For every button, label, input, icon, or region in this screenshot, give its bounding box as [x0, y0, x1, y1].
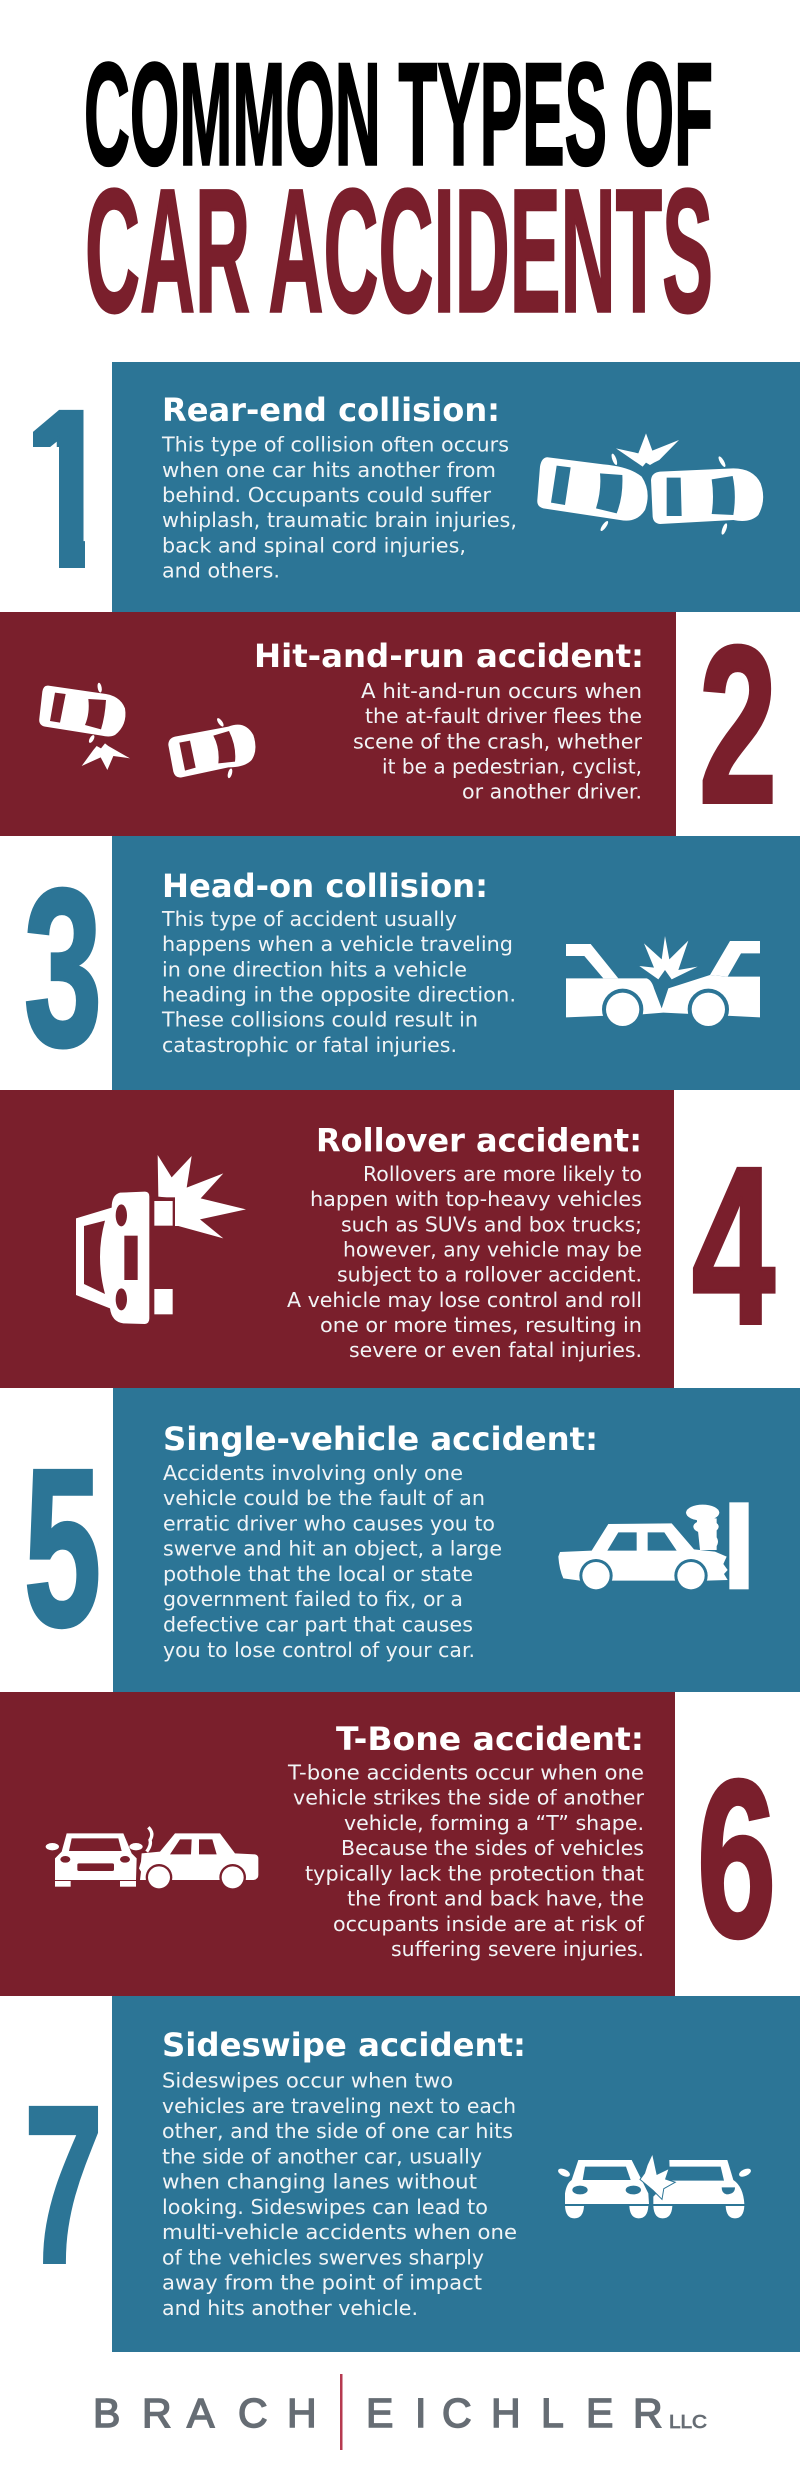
body text: hit-and-run accident — [353, 679, 643, 804]
panel: rear-end collision — [18, 362, 800, 614]
body text: head-on collision — [161, 907, 516, 1057]
body text: head-on collision: These collisions could result in — [161, 1008, 478, 1032]
logo: Brach Eichler LLC: LLC — [669, 2412, 707, 2432]
body text: rollover accident: one or more times, resulting in — [320, 1313, 642, 1337]
body text: hit-and-run accident: the at-fault driver flees the — [365, 704, 642, 728]
body text: sideswipe accident: and hits another vehicle. — [162, 2296, 418, 2320]
body text: single-vehicle accident: pothole that the local or state — [163, 1562, 473, 1586]
body text: rollover accident — [287, 1162, 642, 1362]
body text: t-bone accident: T-bone accidents occur when one — [287, 1760, 644, 1784]
icon: hit-and-run cars — [39, 682, 255, 779]
body text: rollover accident: however, any vehicle may be — [343, 1238, 642, 1262]
body text: t-bone accident: typically lack the protection that — [305, 1862, 644, 1886]
logo: Brach Eichler LLC — [93, 2374, 707, 2450]
heading: sideswipe accident: Sideswipe accident: — [162, 2026, 526, 2064]
body text: t-bone accident: the front and back have, the — [347, 1886, 644, 1910]
body text: single-vehicle accident: erratic driver who causes you to — [163, 1512, 495, 1536]
number 3: 3 — [24, 843, 102, 1093]
icon: t-bone collision — [46, 1827, 258, 1891]
body text: hit-and-run accident: or another driver. — [462, 780, 642, 804]
body text: sideswipe accident: multi-vehicle accidents when one — [162, 2220, 517, 2244]
panel: hit-and-run accident — [0, 600, 777, 850]
body text: single-vehicle accident: Accidents involving only one — [163, 1461, 463, 1485]
icon: two cars rear-end crash — [537, 433, 763, 535]
number 7: 7 — [24, 2060, 103, 2310]
heading: t-bone accident: T-Bone accident: — [336, 1720, 644, 1758]
heading: head-on collision: Head-on collision: — [162, 867, 488, 905]
body text: sideswipe accident: Sideswipes occur when two — [162, 2068, 453, 2092]
body text: t-bone accident: Because the sides of vehicles — [341, 1836, 644, 1860]
body text: rollover accident: Rollovers are more likely to — [363, 1162, 642, 1186]
heading: rear-end collision: Rear-end collision: — [162, 391, 500, 429]
heading: rollover accident: Rollover accident: — [316, 1122, 642, 1160]
body text: sideswipe accident: when changing lanes without — [162, 2170, 477, 2194]
body text: rollover accident: happen with top-heavy vehicles — [310, 1187, 642, 1211]
title — [84, 32, 713, 350]
body text: t-bone accident: vehicle strikes the side of another — [293, 1786, 645, 1810]
body text: hit-and-run accident: it be a pedestrian, cyclist, — [382, 754, 642, 778]
body text: sideswipe accident: looking. Sideswipes can lead to — [162, 2195, 488, 2219]
icon: car hitting a wall with smoke — [558, 1502, 749, 1592]
body text: single-vehicle accident: swerve and hit an object, a large — [163, 1536, 502, 1560]
body text: rollover accident: A vehicle may lose control and roll — [287, 1288, 642, 1312]
body text: rear-end collision: when one car hits another from — [162, 458, 496, 482]
body text: head-on collision: catastrophic or fatal injuries. — [162, 1033, 457, 1057]
body text: rollover accident: severe or even fatal injuries. — [349, 1338, 642, 1362]
body text: single-vehicle accident: defective car part that causes — [163, 1612, 473, 1636]
body text: single-vehicle accident: government failed to fix, or a — [163, 1587, 463, 1611]
body text: hit-and-run accident: A hit-and-run occurs when — [361, 679, 642, 703]
icon: sideswipe cars — [557, 2155, 752, 2218]
body text: sideswipe accident — [162, 2068, 517, 2320]
body text: sideswipe accident: vehicles are traveling next to each — [162, 2094, 516, 2118]
panel: sideswipe accident — [24, 1996, 800, 2352]
panel: head-on collision — [24, 836, 800, 1093]
panel: t-bone accident — [0, 1692, 776, 1996]
body text: hit-and-run accident: scene of the crash, whether — [353, 730, 643, 754]
body text: rollover accident: such as SUVs and box trucks; — [341, 1212, 642, 1236]
logo: Brach Eichler LLC: EICHLER — [366, 2390, 663, 2436]
body text: sideswipe accident: away from the point of impact — [162, 2270, 482, 2294]
body text: sideswipe accident: of the vehicles swerves sharply — [162, 2246, 484, 2270]
body text: rear-end collision: and others. — [162, 558, 280, 582]
body text: head-on collision: in one direction hits a vehicle — [162, 958, 467, 982]
body text: single-vehicle accident — [163, 1461, 502, 1662]
body text: single-vehicle accident: you to lose control of your car. — [163, 1638, 475, 1662]
heading: single-vehicle accident: Single-vehicle accident: — [163, 1420, 598, 1458]
body text: sideswipe accident: the side of another car, usually — [162, 2144, 482, 2168]
body text: t-bone accident: suffering severe injuries. — [391, 1937, 644, 1961]
logo: Brach Eichler LLC: BRACH — [93, 2390, 317, 2436]
panel: rollover accident — [0, 1090, 775, 1388]
body text: sideswipe accident: other, and the side of one car hits — [162, 2119, 513, 2143]
body text: rear-end collision — [161, 432, 517, 582]
body text: head-on collision: heading in the opposite direction. — [162, 982, 516, 1006]
body text: rear-end collision: behind. Occupants could suffer — [162, 483, 492, 507]
body text: rear-end collision: This type of collision often occurs — [161, 432, 509, 456]
number 1: 1 — [18, 364, 114, 614]
body text: head-on collision: This type of accident usually — [161, 907, 457, 931]
body text: rear-end collision: back and spinal cord injuries, — [162, 534, 466, 558]
body text: t-bone accident: occupants inside are at risk of — [333, 1912, 645, 1936]
body text: rollover accident: subject to a rollover accident. — [337, 1262, 642, 1286]
body text: single-vehicle accident: vehicle could be the fault of an — [163, 1486, 485, 1510]
icon: head-on crash — [566, 936, 760, 1030]
body text: t-bone accident — [287, 1760, 645, 1961]
icon: overturned car — [76, 1155, 246, 1324]
number 5: 5 — [24, 1423, 101, 1673]
body text: rear-end collision: whiplash, traumatic brain injuries, — [162, 508, 517, 532]
panel: single-vehicle accident — [24, 1388, 800, 1692]
heading: hit-and-run accident: Hit-and-run accident: — [254, 637, 644, 675]
body text: t-bone accident: vehicle, forming a “T” shape. — [344, 1811, 644, 1835]
body text: head-on collision: happens when a vehicle traveling — [162, 932, 513, 956]
